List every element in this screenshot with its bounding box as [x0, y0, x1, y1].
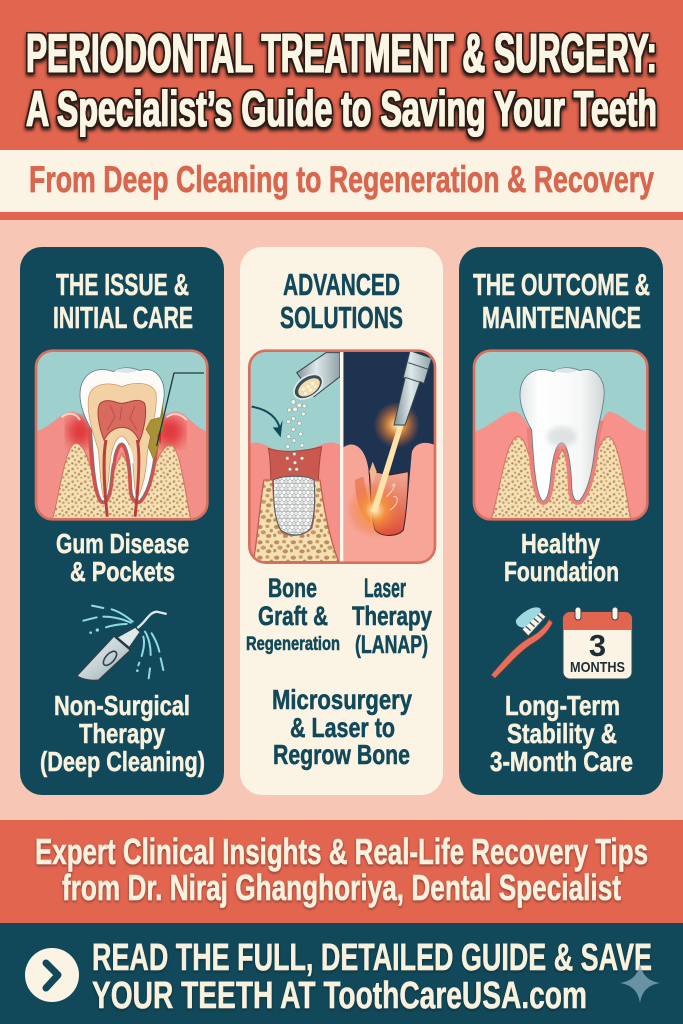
text: microsurgery and laser [272, 684, 412, 770]
label: long-term stability: Stability & [507, 718, 617, 749]
panel heading: advanced solutions [280, 267, 403, 335]
illustration: healthy tooth [474, 351, 647, 519]
label: healthy foundation [504, 528, 619, 587]
panel: the issue and initial care [20, 247, 224, 795]
subtitle band [0, 150, 683, 220]
panel heading: issue: THE ISSUE & [56, 267, 189, 302]
panel: advanced solutions [240, 247, 443, 795]
label: healthy foundation: Foundation [504, 556, 619, 587]
label: bone graft and regeneration [246, 573, 340, 655]
title [26, 22, 657, 137]
expert insights band [0, 820, 683, 923]
header band [0, 0, 683, 150]
label: long-term stability: Long-Term [505, 690, 620, 721]
icon: toothbrush [491, 607, 553, 678]
icon: chevron button [25, 948, 79, 1002]
icon: 3 months calendar: MONTHS [570, 659, 625, 676]
label: laser therapy lanap: Laser [364, 573, 406, 603]
label: bone graft and regeneration: Bone [268, 573, 317, 603]
illustration: diseased tooth with pocket [36, 351, 207, 519]
label: non-surgical therapy: Therapy [79, 718, 165, 749]
icon: 3 months calendar [563, 607, 632, 679]
call to action text [92, 937, 652, 1017]
label: long-term stability [490, 690, 633, 777]
panel heading: issue [53, 267, 193, 335]
label: non-surgical therapy: Non-Surgical [54, 690, 190, 721]
label: non-surgical therapy [40, 690, 205, 777]
label: laser therapy lanap: (LANAP) [355, 631, 428, 659]
call to action band [0, 923, 683, 1024]
icon: ultrasonic scaler [77, 606, 167, 680]
panel heading: advanced solutions: ADVANCED [283, 267, 400, 302]
label: non-surgical therapy: (Deep Cleaning) [40, 746, 205, 777]
label: gum disease and pockets [56, 528, 189, 587]
label: healthy foundation: Healthy [521, 528, 600, 559]
text: microsurgery and laser: Microsurgery [272, 684, 412, 715]
label: long-term stability: 3-Month Care [490, 746, 633, 777]
text: microsurgery and laser: Regrow Bone [273, 739, 410, 770]
panel heading: outcome [473, 267, 650, 335]
label: laser therapy lanap: Therapy [352, 601, 432, 631]
label: laser therapy lanap [352, 573, 432, 659]
panel heading: advanced solutions: SOLUTIONS [280, 300, 403, 335]
label: gum disease and pockets: & Pockets [70, 556, 175, 587]
label: bone graft and regeneration: Regeneration [246, 634, 340, 655]
panel: the outcome and maintenance [459, 247, 663, 795]
label: bone graft and regeneration: Graft & [258, 601, 328, 631]
label: gum disease and pockets: Gum Disease [56, 528, 189, 559]
illustration: bone graft and laser therapy [249, 351, 435, 563]
text: microsurgery and laser: & Laser to [290, 712, 395, 743]
icon: sparkle [620, 963, 660, 1003]
icon: 3 months calendar: 3 [589, 628, 606, 663]
panel heading: issue: INITIAL CARE [53, 300, 193, 335]
